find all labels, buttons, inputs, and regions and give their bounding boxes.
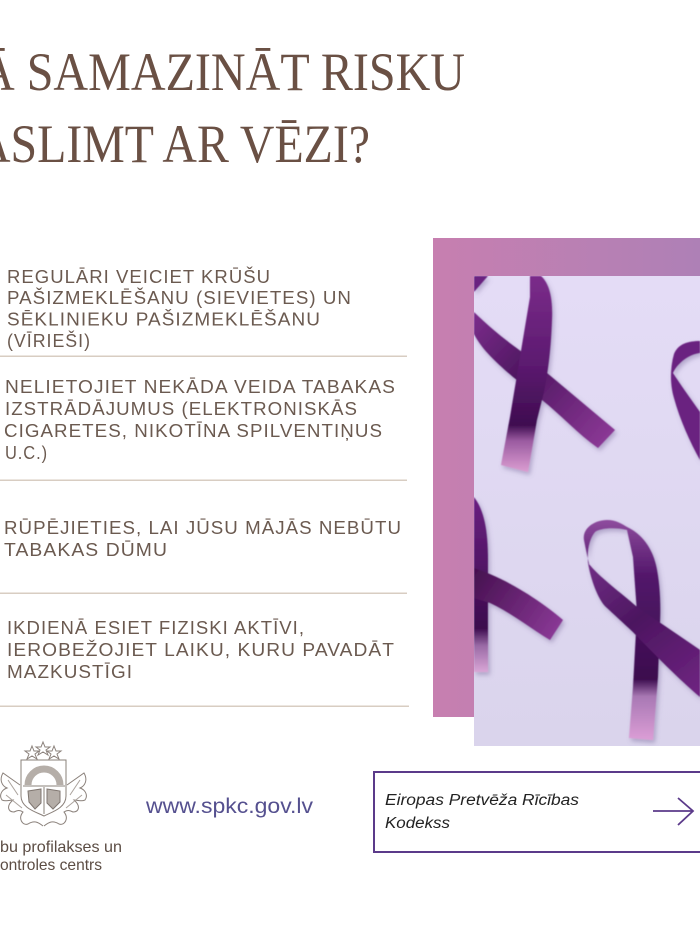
panel: ribbon photo	[474, 276, 700, 746]
icon: ribbon lower right	[584, 520, 700, 740]
icon: coat of arms logo	[1, 742, 86, 826]
text block: tobacco products: IZSTRĀDĀJUMUS (ELEKTRONISKĀS	[5, 399, 358, 419]
text block: self-examination: REGULĀRI VEICIET KRŪŠU	[7, 266, 271, 287]
icon: shield	[21, 760, 66, 816]
website link: www.spkc.gov.lv	[145, 795, 314, 818]
text block: organisation name: bu profilakses un	[0, 839, 122, 856]
text block: tobacco products: U.C.)	[5, 443, 48, 463]
text block: physical activity	[7, 618, 395, 682]
text block: self-examination: SĒKLINIEKU PAŠIZMEKLĒŠANU	[7, 308, 321, 330]
text block: tobacco products: CIGARETES, NIKOTĪNA SPILVENTIŅUS	[4, 421, 383, 441]
title	[0, 42, 465, 174]
text block: organisation name: ontroles centrs	[0, 857, 102, 874]
button label	[385, 792, 579, 832]
text block: physical activity: MAZKUSTĪGI	[7, 662, 133, 682]
icon: ribbon lower left	[474, 497, 563, 672]
icon: arrow	[653, 798, 693, 825]
text block: tobacco products: NELIETOJIET NEKĀDA VEIDA TABAKAS	[5, 377, 396, 397]
icon: ribbon top right	[671, 341, 700, 460]
button label: Kodekss	[385, 815, 450, 832]
icon: ribbon top left	[474, 276, 615, 472]
text block: smoke-free home: RŪPĒJIETIES, LAI JŪSU MĀJĀS NEBŪTU	[4, 518, 402, 538]
text block: self-examination	[7, 266, 352, 351]
icon: three stars	[25, 742, 61, 759]
text block: self-examination: PAŠIZMEKLĒŠANU (SIEVIETES) UN	[7, 287, 352, 308]
button: code link	[374, 772, 700, 852]
text block: smoke-free home: TABAKAS DŪMU	[4, 540, 168, 560]
panel: pink frame	[433, 238, 700, 717]
button label: Eiropas Pretvēža Rīcības	[385, 792, 579, 809]
text block: physical activity: IKDIENĀ ESIET FIZISKI AKTĪVI,	[7, 618, 305, 638]
text block: physical activity: IEROBEŽOJIET LAIKU, KURU PAVADĀT	[7, 640, 395, 660]
text block: organisation name	[0, 839, 122, 874]
icon: oak wreath	[1, 773, 86, 826]
text block: self-examination: (VĪRIEŠI)	[7, 330, 91, 351]
text block: tobacco products	[4, 377, 396, 463]
text block: smoke-free home	[4, 518, 402, 560]
